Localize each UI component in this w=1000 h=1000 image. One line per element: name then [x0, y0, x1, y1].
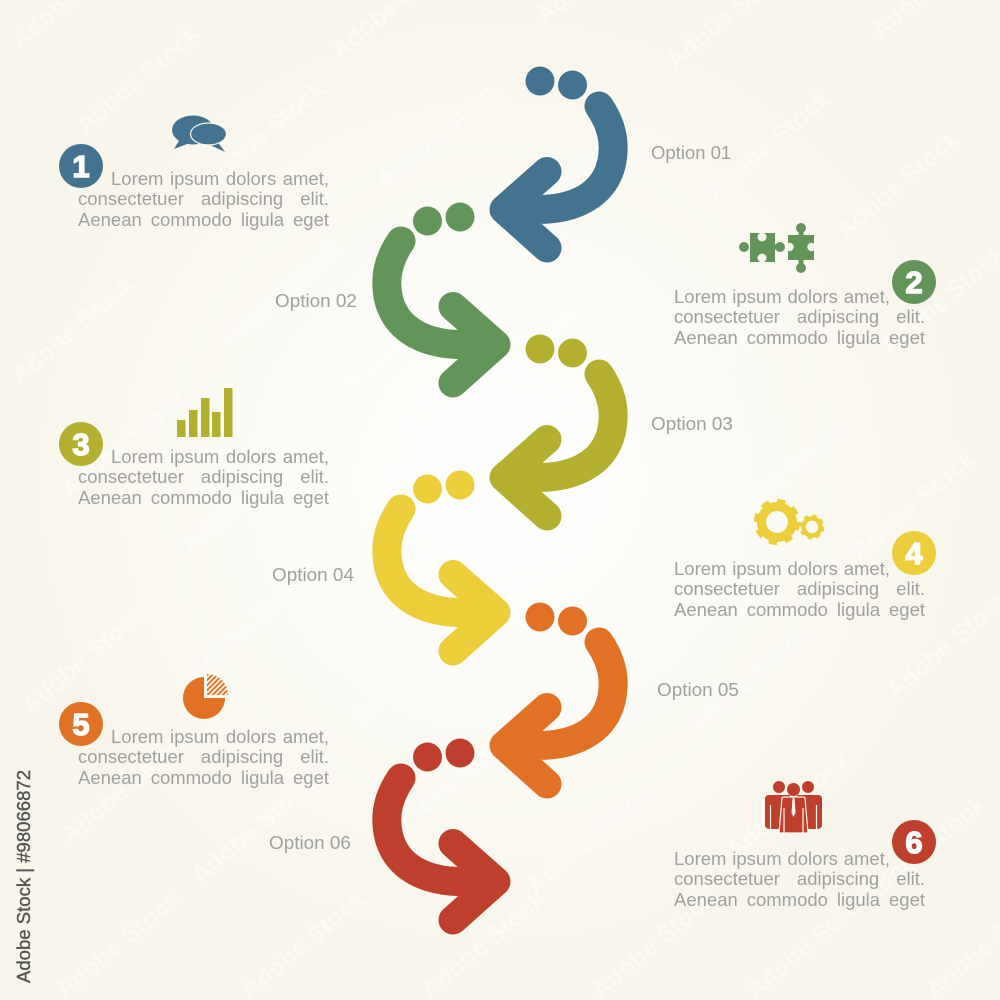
watermark: Adobe Stock: [831, 125, 966, 245]
text block 2: Aenean commodo ligula eget: [674, 327, 925, 348]
watermark: Adobe Stock: [386, 720, 521, 840]
watermark: Adobe Stock: [506, 250, 641, 370]
option labels: [269, 142, 739, 854]
text block 6: consectetuer adipiscing elit.: [674, 868, 925, 889]
text block 6: [674, 848, 925, 910]
text block 1: [78, 168, 329, 230]
watermark: Adobe Stock: [701, 85, 836, 205]
text block 3: consectetuer adipiscing elit.: [78, 466, 329, 487]
watermark: Adobe Stock: [551, 575, 686, 695]
text block 4: consectetuer adipiscing elit.: [674, 578, 925, 599]
text block 6: Lorem ipsum dolors amet,: [674, 848, 890, 869]
label: option 05: Option 05: [657, 680, 739, 701]
watermark: Adobe Stock: [186, 770, 321, 890]
text block 1: Aenean commodo ligula eget: [78, 209, 329, 230]
arrow 1: blue: [504, 66, 613, 248]
arrow 6: red: [387, 738, 496, 920]
text block 2: Lorem ipsum dolors amet,: [674, 286, 890, 307]
badge 5: [59, 702, 103, 746]
text block 4: [674, 558, 925, 620]
text block 3: Aenean commodo ligula eget: [78, 487, 329, 508]
watermark: Adobe Stock: [371, 390, 506, 510]
text block 4: Aenean commodo ligula eget: [674, 599, 925, 620]
watermark: Adobe Stock: [716, 415, 851, 535]
label: option 06: Option 06: [269, 833, 351, 854]
watermark: Adobe Stock: [56, 730, 191, 850]
watermark: Adobe Stock: [71, 20, 206, 140]
badge 4: [892, 531, 936, 575]
badge 3: [59, 422, 103, 466]
badge 6: [892, 820, 936, 864]
stock credit: Adobe Stock | #98066872: [14, 770, 34, 983]
text block 5: Lorem ipsum dolors amet,: [111, 726, 329, 747]
icon: bar chart: [177, 388, 232, 437]
watermark: Adobe Stock: [496, 120, 631, 240]
watermark: Adobe Stock: [346, 610, 481, 730]
label: option 01: Option 01: [651, 142, 731, 163]
text block 3: Lorem ipsum dolors amet,: [111, 446, 329, 467]
icon: pie chart: [183, 674, 228, 719]
badge 2: 2: [905, 265, 923, 300]
watermark: Adobe Stock: [176, 440, 311, 560]
watermark: Adobe Stock: [181, 565, 316, 685]
label: option 03: Option 03: [651, 414, 733, 435]
watermark: Adobe Stock: [856, 790, 991, 910]
text block 5: Aenean commodo ligula eget: [78, 767, 329, 788]
icon: speech bubbles: [172, 116, 226, 152]
text block 6: Aenean commodo ligula eget: [674, 889, 925, 910]
arrow 5: orange: [504, 602, 613, 784]
text block 2: [674, 286, 925, 348]
text block 4: Lorem ipsum dolors amet,: [674, 558, 890, 579]
badge 1: 1: [72, 149, 90, 184]
watermark: Adobe Stock: [846, 445, 981, 565]
watermark: Adobe Stock: [506, 450, 641, 570]
watermark: Adobe Stock: [211, 235, 346, 355]
text block 1: Lorem ipsum dolors amet,: [111, 168, 329, 189]
watermark: Adobe Stock: [56, 385, 191, 505]
text block 1: consectetuer adipiscing elit.: [78, 188, 329, 209]
text block 5: [78, 726, 329, 788]
icon: gears: [756, 502, 823, 542]
watermark: Adobe Stock: [666, 290, 801, 410]
text block 5: consectetuer adipiscing elit.: [78, 746, 329, 767]
badge 4: 4: [905, 536, 923, 571]
badge 5: 5: [72, 707, 90, 742]
badge 6: 6: [905, 825, 923, 860]
watermark: Adobe Stock: [721, 745, 856, 865]
watermark: Adobe Stock: [6, 270, 141, 390]
label: option 04: Option 04: [272, 565, 354, 586]
badge 1: [59, 144, 103, 188]
watermark: Adobe Stock: [521, 780, 656, 900]
watermark: Adobe Stock: [196, 75, 331, 195]
arrow 3: olive: [504, 334, 613, 516]
icon: puzzle pieces: [739, 223, 816, 273]
watermark: Adobe Stock: [681, 620, 816, 740]
text block 3: [78, 446, 329, 508]
watermark: Adobe Stock: [371, 75, 506, 195]
watermark: Adobe Stock: [16, 600, 151, 720]
badge 3: 3: [72, 427, 90, 462]
icon: business people: [765, 781, 822, 833]
arrow 2: green: [387, 202, 496, 383]
badge 2: [892, 260, 936, 304]
text block 2: consectetuer adipiscing elit.: [674, 306, 925, 327]
watermark: Adobe Stock: [336, 280, 471, 400]
arrow 4: yellow: [387, 470, 496, 651]
label: option 02: Option 02: [275, 291, 357, 312]
